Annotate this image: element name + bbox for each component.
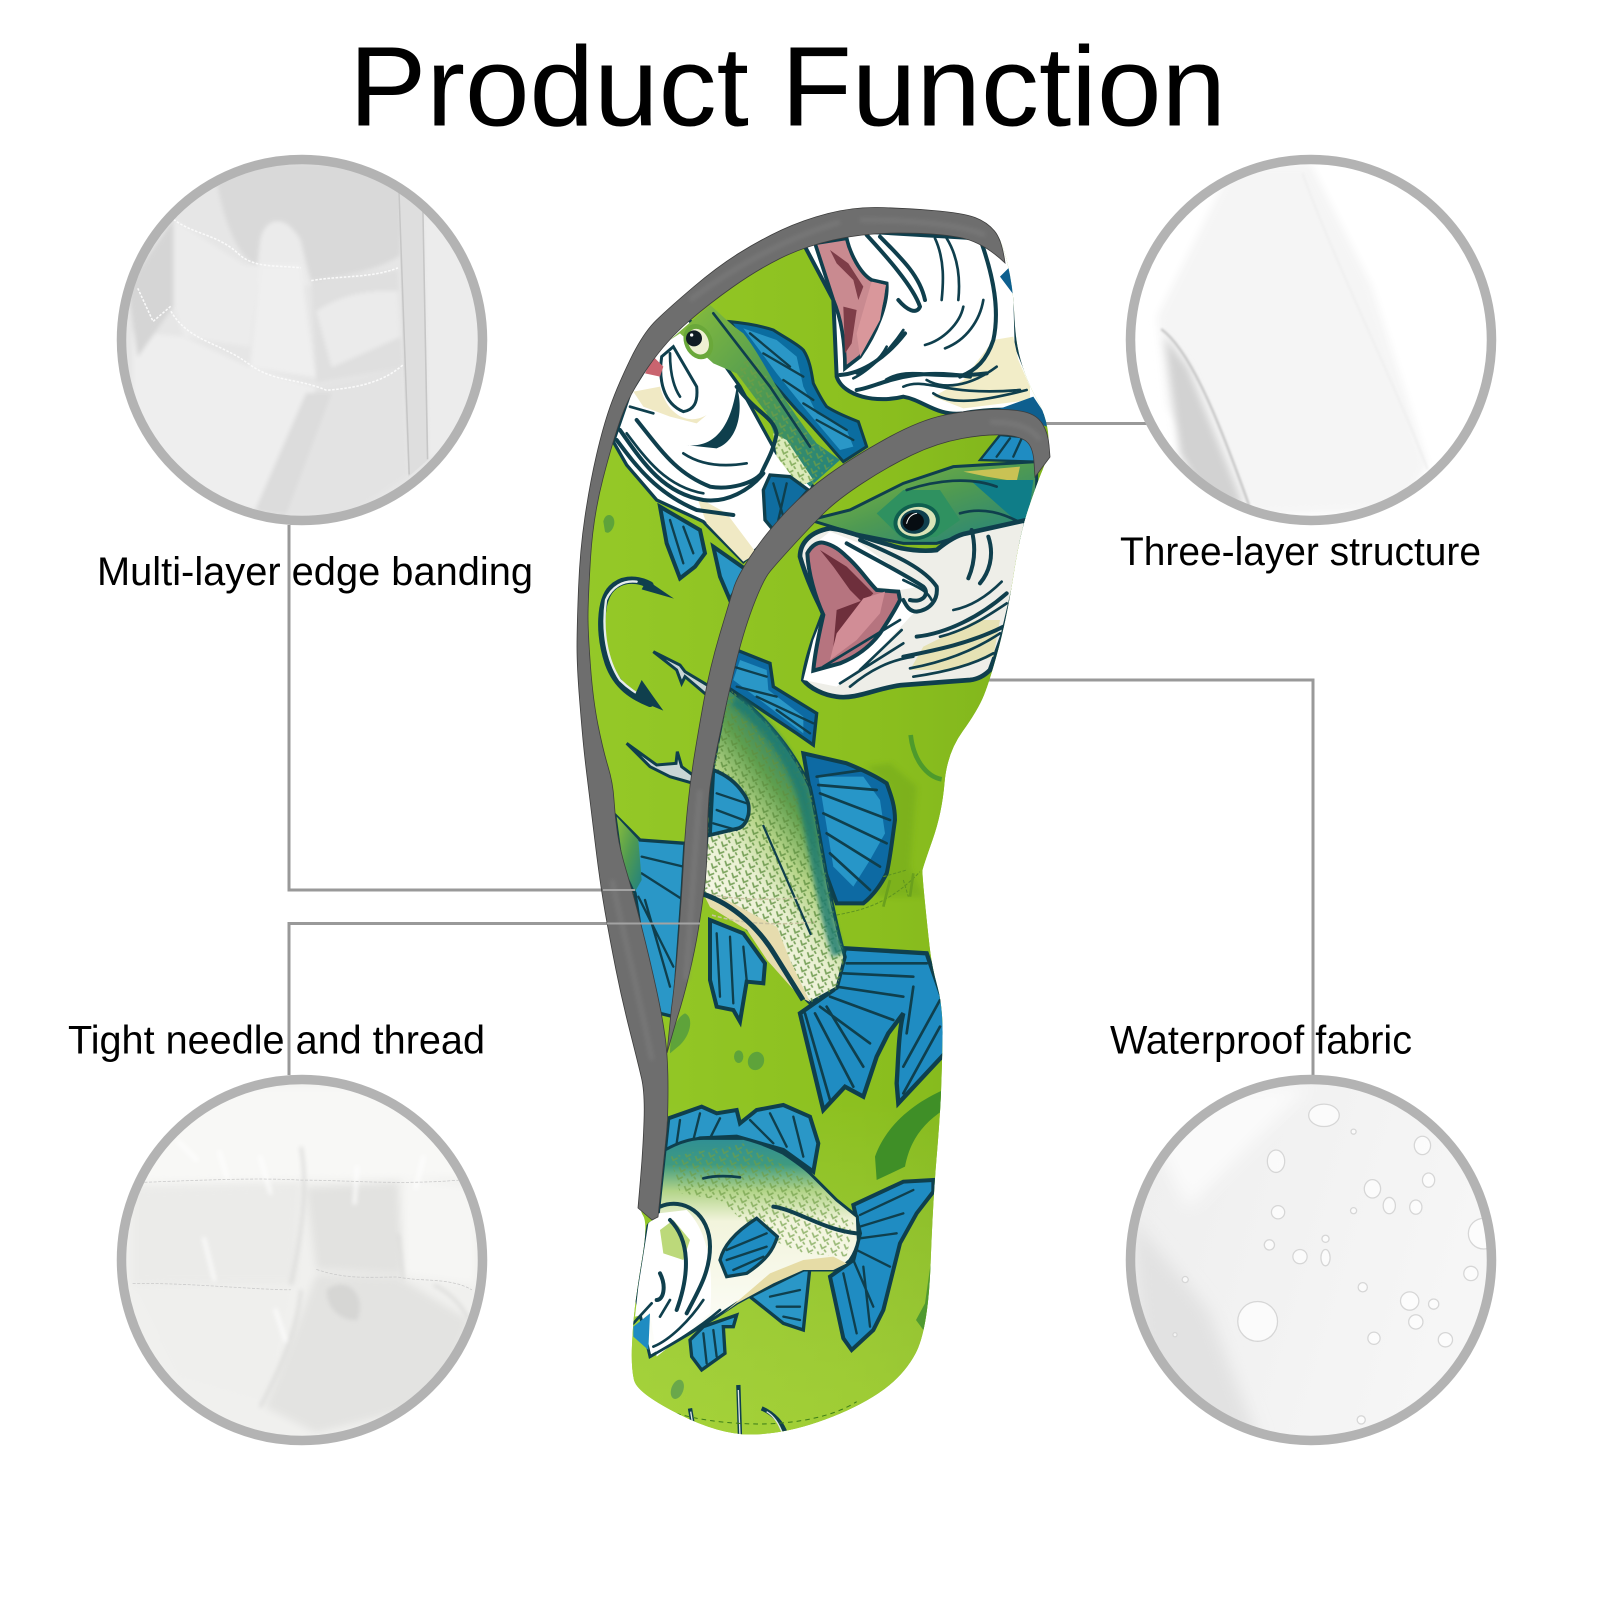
fish: big head — [800, 462, 1037, 697]
leader line: three-layer structure — [1046, 422, 1147, 425]
hook: lower hook — [627, 743, 695, 783]
fish: tail behind seam — [617, 817, 685, 1017]
detail circle: multi-layer edge banding — [116, 155, 490, 527]
dark green crescent — [911, 735, 942, 779]
fish: jumping left — [613, 305, 867, 600]
gray binding: outer edge — [577, 207, 1005, 1220]
detail circle: tight needle and thread — [116, 1074, 489, 1447]
fish: open mouth top right — [805, 230, 1050, 427]
bottom hooks — [690, 1385, 787, 1437]
label: waterproof fabric: Waterproof fabric — [1110, 1018, 1412, 1062]
stitched gather — [837, 870, 920, 915]
label: multi-layer edge banding: Multi-layer edge banding — [97, 550, 533, 594]
fish: middle pectoral fin — [710, 770, 749, 835]
fish: big head dorsal fin — [980, 435, 1037, 462]
green spots — [670, 1013, 690, 1053]
upper panel print — [602, 230, 1050, 1017]
fish: middle tail and lower fin — [670, 870, 945, 1110]
fish: middle fins — [727, 650, 895, 903]
front panel print — [632, 435, 1044, 1434]
label: three-layer structure: Three-layer structure — [1120, 530, 1481, 574]
gray binding: front panel edge — [667, 409, 1050, 1053]
leader line: multi-layer edge banding — [289, 525, 603, 890]
label: tight needle and thread: Tight needle and thread — [68, 1018, 485, 1062]
detail circle: waterproof fabric — [1126, 1074, 1499, 1447]
binding shading — [612, 220, 1040, 1060]
leader line: tight needle and thread — [289, 924, 607, 1075]
title: Product Function — [349, 24, 1226, 150]
hook: large left hook — [602, 580, 674, 711]
wrinkle shading — [872, 765, 920, 896]
fish: middle body — [703, 688, 845, 1003]
green spot — [603, 515, 614, 533]
leader line: waterproof fabric — [985, 680, 1313, 1075]
leader lines crossing the product — [603, 890, 700, 924]
dark green leaf — [875, 1090, 943, 1180]
water droplets — [1173, 1104, 1499, 1424]
hook: middle hook — [653, 652, 710, 695]
product: fish-print golf headcover — [577, 207, 1057, 1440]
green spots lower — [916, 1262, 931, 1330]
headcover body — [577, 207, 1049, 1435]
detail circle: three-layer structure — [1126, 155, 1498, 527]
hem stitching — [652, 1402, 857, 1424]
fish: bottom bass — [633, 1105, 933, 1370]
